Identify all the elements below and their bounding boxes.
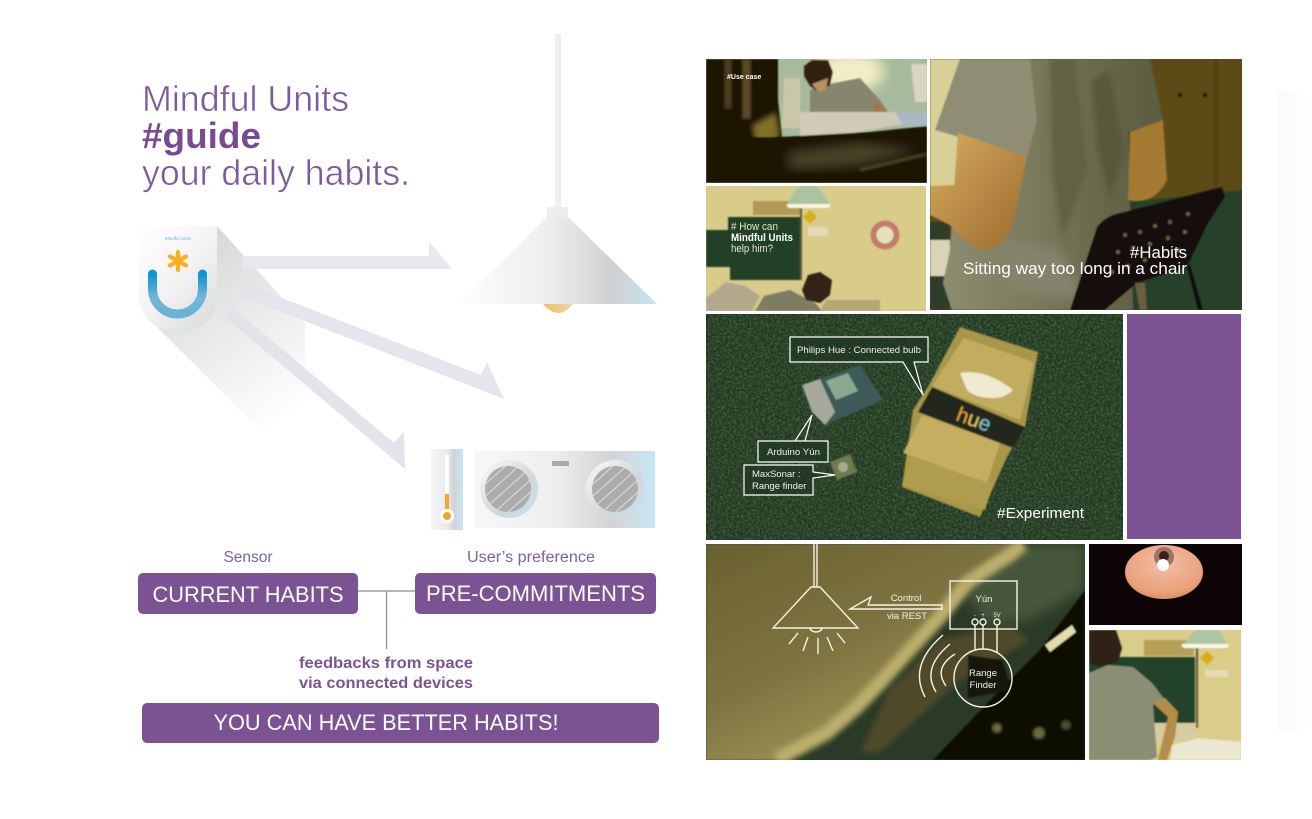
icon: thermometer (431, 449, 463, 530)
arrow: to middle space (238, 283, 504, 399)
diagram labels: Yún (976, 594, 992, 605)
photo: experiment: MaxSonar : (752, 469, 801, 480)
illustration: cast shadow of sensor (139, 226, 305, 447)
faint right edge shadow (1277, 90, 1312, 730)
feedback text: feedbacks from space (299, 655, 473, 672)
photo: use case (706, 52, 927, 183)
photo: lamp from below (1089, 544, 1242, 625)
photo: experiment: Range finder (752, 481, 806, 492)
arrow: to devices (225, 308, 405, 469)
feedback text: via connected devices (299, 675, 473, 692)
arrow: to lamp (242, 241, 452, 269)
diagram labels: Finder (970, 680, 996, 691)
photo: experiment (706, 314, 1123, 540)
button: current habits (138, 573, 358, 614)
diagram labels: Control (891, 593, 921, 604)
diagram labels: + (981, 613, 985, 619)
photo object: cardboard hue box (902, 327, 1038, 517)
connector lines (350, 591, 416, 649)
title: your daily habits. (142, 152, 410, 193)
icon: U mark (152, 274, 202, 314)
photo: connection diagram (706, 544, 1085, 760)
caption: habits: #Habits (1130, 244, 1187, 262)
caption: habits (963, 244, 1188, 278)
banner: better habits: YOU CAN HAVE BETTER HABITS! (214, 710, 558, 735)
panel: purple block (1127, 314, 1241, 539)
photo: experiment: Philips Hue : Connected bulb (797, 345, 921, 356)
diagram: lamp, arrow and sensor wiring (773, 544, 1017, 707)
feedback text (299, 655, 473, 692)
icon: Mindful Units sensor: Mindful Units (165, 236, 192, 241)
title (142, 78, 410, 193)
photo object: cardboard hue box: hue (953, 403, 994, 437)
icon: speaker device (474, 451, 655, 528)
label: User's preference: User’s preference (467, 549, 595, 566)
caption: how can Mindful Units help him: # How can (731, 221, 778, 233)
icon: Mindful Units sensor (139, 226, 217, 331)
label: Sensor: Sensor (223, 549, 273, 566)
icon: asterisk (170, 252, 186, 270)
caption: experiment: #Experiment (997, 506, 1084, 522)
diagram labels: 5V (993, 613, 1001, 619)
title: Mindful Units (142, 78, 349, 119)
caption: habits: Sitting way too long in a chair (963, 260, 1188, 278)
diagram labels: Range (969, 668, 997, 679)
diagram labels (887, 593, 1001, 691)
button: current habits: CURRENT HABITS (152, 582, 344, 607)
button: pre-commitments: PRE-COMMITMENTS (426, 581, 645, 606)
photo object: range finder (830, 454, 857, 480)
callouts: hardware labels (744, 337, 928, 495)
photo: sitting in a chair (930, 59, 1242, 310)
button: pre-commitments (415, 573, 656, 614)
caption: how can Mindful Units help him: help him? (731, 243, 773, 255)
diagram labels: - (974, 613, 976, 619)
photo object: arduino board (802, 365, 883, 425)
title: #guide (142, 115, 261, 156)
caption: how can Mindful Units help him (731, 221, 793, 255)
banner: better habits (142, 703, 659, 743)
photo: how can Mindful Units help him (706, 186, 926, 311)
photo: man standing at blackboard (1089, 630, 1241, 760)
icon: pendant lamp (459, 34, 657, 313)
photo: experiment: Arduino Yún (767, 447, 820, 458)
caption: use case: #Use case (727, 74, 761, 81)
caption: how can Mindful Units help him: Mindful Units (731, 232, 793, 244)
diagram labels: via REST (887, 611, 927, 622)
